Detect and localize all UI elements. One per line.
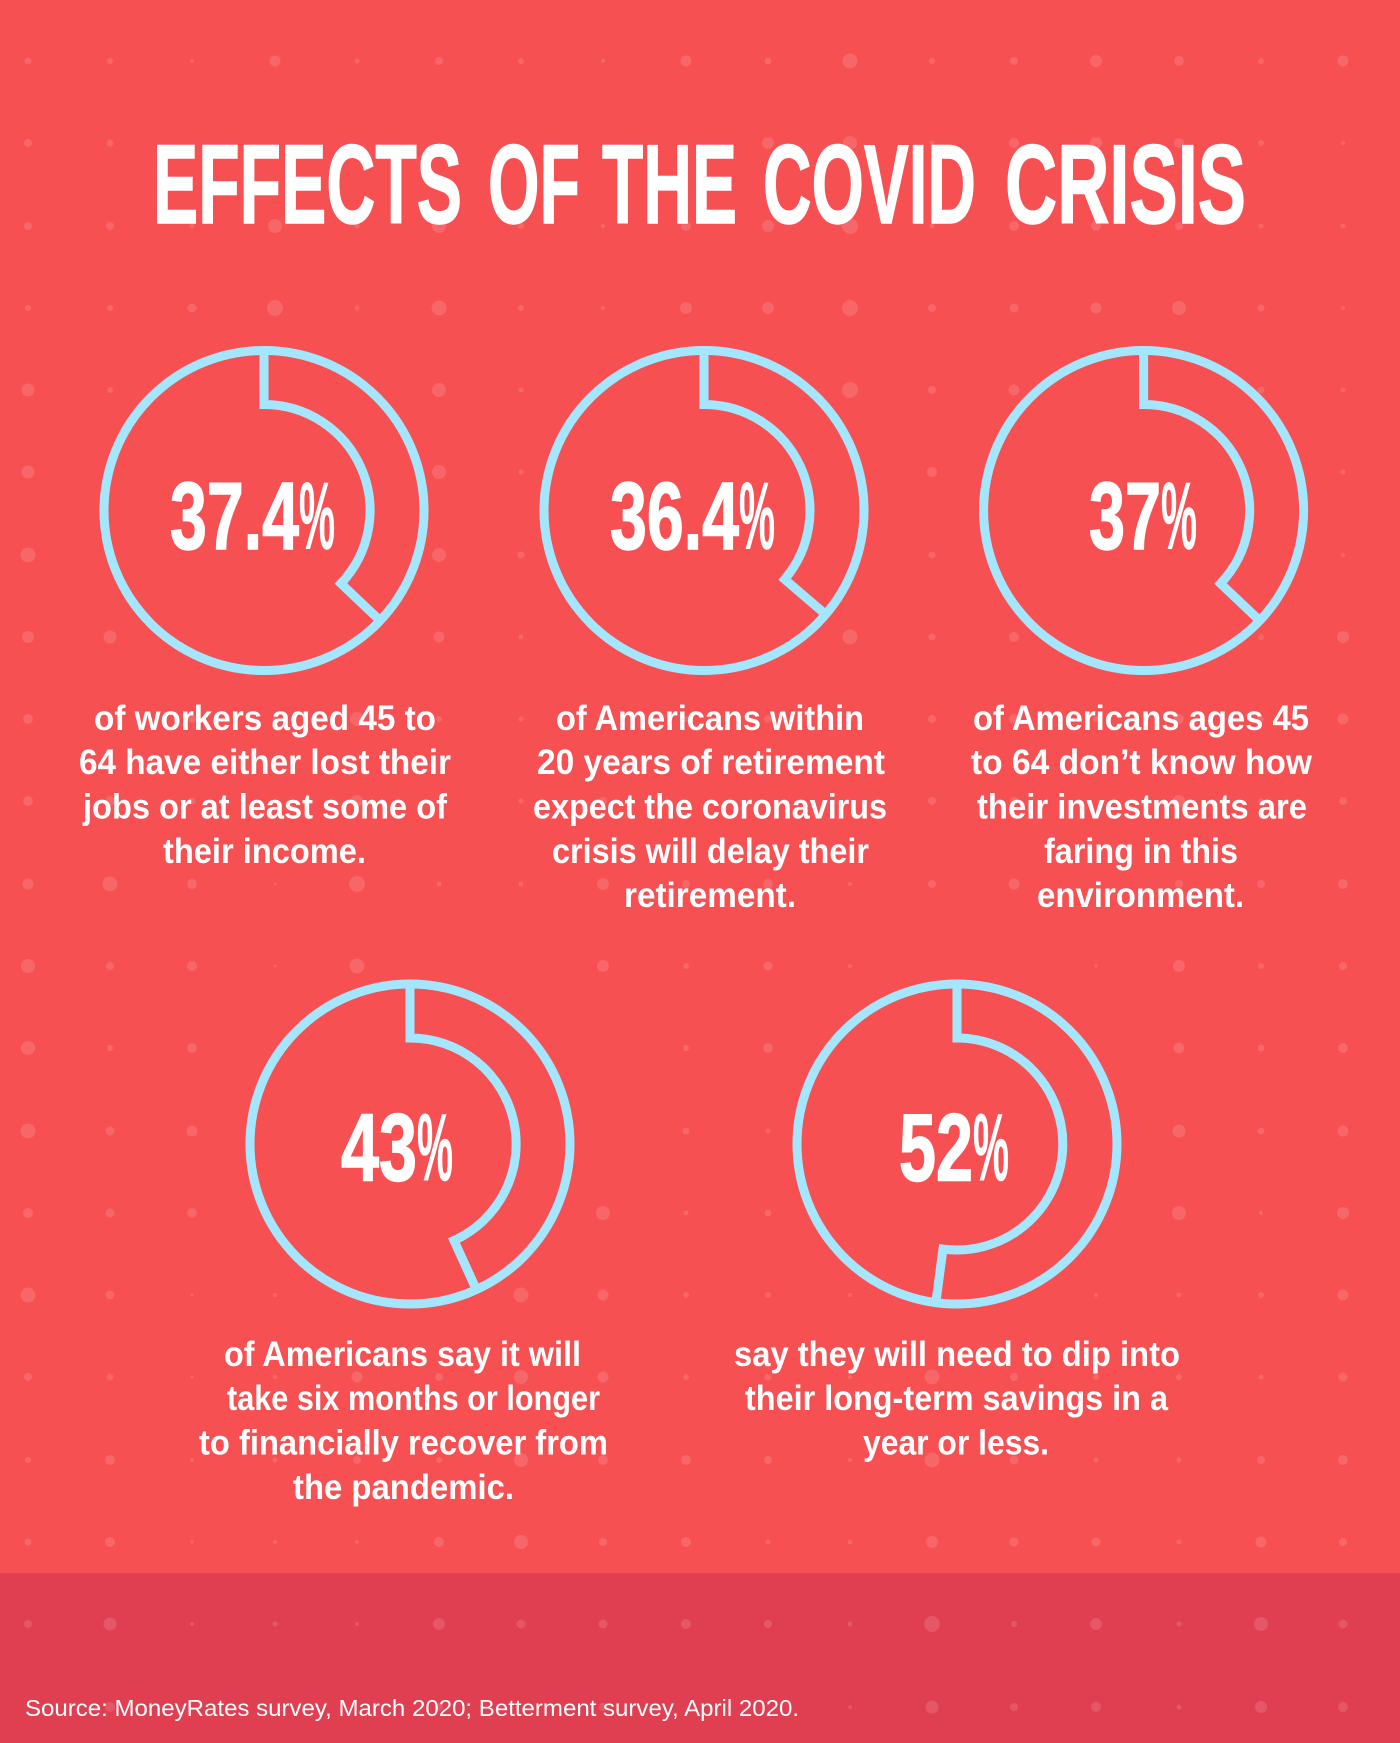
title: THE: [602, 122, 737, 247]
description: six months or longer to recover: of Americans say it will: [224, 1335, 581, 1374]
description: Americans within 20 years of retirement: [533, 699, 887, 915]
source note: Source: MoneyRates survey, March 2020; Betterment survey, April 2020.: [25, 1695, 799, 1721]
description: workers aged 45 to 64: of workers aged 45 to: [94, 699, 436, 738]
description: workers aged 45 to 64: [79, 699, 451, 871]
description: workers aged 45 to 64: 64 have either lost their: [79, 743, 451, 782]
description: six months or longer to recover: to financially recover from: [199, 1424, 608, 1462]
donut chart: 43%: [250, 984, 570, 1304]
donut chart: 52%: [797, 984, 1117, 1304]
description: dip into long-term savings: their long-term savings in a: [745, 1379, 1168, 1418]
panel: stat 36.4% Americans within 20 years of retirement: [533, 350, 887, 915]
title: EFFECTS: [153, 122, 462, 247]
panel: stat 37.4% workers aged 45 to 64: [79, 350, 451, 871]
description: Americans ages 45 to 64: of Americans ages 45: [973, 699, 1309, 738]
description: Americans ages 45 to 64: [971, 699, 1313, 915]
panel: stat 37.4% workers aged 45 to 64: %: [299, 463, 335, 570]
title: [153, 122, 1246, 247]
description: Americans within 20 years of retirement: 20 years of retirement: [537, 743, 885, 782]
description: dip into long-term savings: year or less.: [863, 1424, 1049, 1462]
panel: stat 52% dip into long-term savings: %: [973, 1094, 1009, 1202]
description: Americans ages 45 to 64: to 64 don’t know how: [971, 743, 1313, 782]
title: COVID: [763, 122, 976, 247]
description: six months or longer to recover: [199, 1335, 608, 1507]
panel: stat 36.4% Americans within 20 years of retirement: %: [739, 463, 775, 570]
description: Americans within 20 years of retirement: expect the coronavirus: [533, 788, 887, 826]
description: workers aged 45 to 64: jobs or at least some of: [82, 788, 447, 826]
description: six months or longer to recover: the pandemic.: [293, 1468, 514, 1507]
title: OF: [488, 122, 580, 247]
donut chart: 37.4%: [104, 350, 424, 670]
description: Americans ages 45 to 64: faring in this: [1044, 832, 1238, 871]
stat value: 37%: 37: [1089, 463, 1161, 570]
description: Americans ages 45 to 64: environment.: [1037, 876, 1244, 915]
donut chart: 37%: [984, 350, 1304, 670]
stat value: 37.4%: 37.4: [170, 463, 299, 570]
stat value: 52%: 52: [899, 1094, 973, 1202]
description: workers aged 45 to 64: their income.: [163, 832, 366, 871]
panel: stat 43% six months or longer to recover: [199, 984, 608, 1507]
description: Americans ages 45 to 64: their investments are: [977, 788, 1307, 826]
panel: stat 43% six months or longer to recover: %: [417, 1094, 453, 1202]
description: Americans within 20 years of retirement: crisis will delay their: [552, 832, 869, 871]
description: Americans within 20 years of retirement: of Americans within: [556, 699, 864, 738]
description: dip into long-term savings: say they will need to dip into: [734, 1335, 1180, 1374]
description: dip into long-term savings: [734, 1335, 1180, 1462]
stat value: 36.4%: 36.4: [610, 463, 739, 570]
stat value: 43%: 43: [341, 1094, 417, 1202]
panel: stat 37% Americans ages 45 to 64: [971, 350, 1313, 915]
footer band: [0, 1573, 1400, 1743]
description: Americans within 20 years of retirement: retirement.: [624, 876, 796, 915]
title: CRISIS: [1005, 122, 1246, 247]
donut chart: 36.4%: [544, 350, 864, 670]
panel: stat 37% Americans ages 45 to 64: %: [1161, 463, 1197, 570]
description: six months or longer to recover: take six months or longer: [227, 1379, 600, 1418]
panel: stat 52% dip into long-term savings: [734, 984, 1180, 1462]
